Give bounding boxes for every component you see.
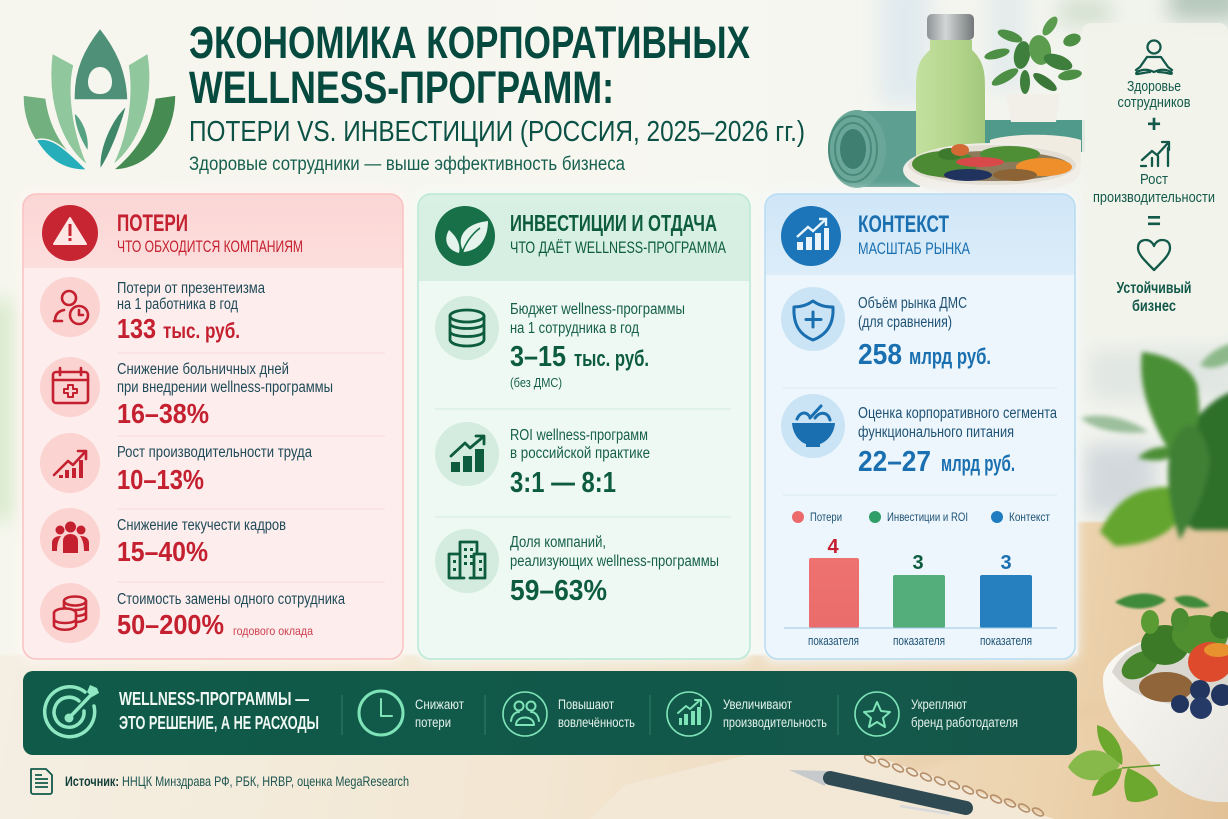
heading: investments: ИНВЕСТИЦИИ И ОТДАЧА <box>510 210 717 236</box>
panel: investments <box>414 190 754 663</box>
source: Источник: <box>65 773 119 789</box>
chart legend: Инвестиции и ROI <box>887 510 968 524</box>
item: share of companies <box>435 529 719 607</box>
item: presenteeism: на 1 работника в год <box>117 296 238 313</box>
panel: formula: бизнес <box>1132 298 1176 315</box>
item: presenteeism: Потери от презентеизма <box>117 280 265 297</box>
illustration: notebook and pen <box>590 752 1054 819</box>
benefit: reduce losses: потери <box>415 715 451 730</box>
title: WELLNESS-ПРОГРАММ: <box>189 62 614 113</box>
benefit: employer brand: Укрепляют <box>911 697 967 712</box>
item: replacement cost <box>40 583 345 643</box>
logo: lotus <box>23 28 176 170</box>
title: ЭКОНОМИКА КОРПОРАТИВНЫХ <box>189 17 750 68</box>
icon: document <box>31 769 52 794</box>
item: ROI: в российской практике <box>510 445 650 462</box>
panel: losses <box>19 190 407 663</box>
item: budget: Бюджет wellness-программы <box>510 301 685 318</box>
item: functional food <box>781 394 1057 478</box>
illustration: rolled yoga mat <box>828 110 1085 188</box>
bar chart: 4 <box>827 536 839 558</box>
item: DMS market: млрд руб. <box>909 344 991 369</box>
chart legend: Контекст <box>1009 510 1050 524</box>
bar chart <box>784 536 1057 648</box>
banner headline: ЭТО РЕШЕНИЕ, А НЕ РАСХОДЫ <box>119 712 319 733</box>
benefit: employer brand <box>855 692 1018 736</box>
illustration: potted plant <box>983 14 1083 122</box>
chart legend <box>792 510 1050 524</box>
panel: formula: + <box>1147 111 1161 138</box>
item: share of companies: реализующих wellness-программы <box>510 553 719 570</box>
benefit: employer brand: бренд работодателя <box>911 715 1018 730</box>
item: replacement cost: годового оклада <box>233 624 313 638</box>
panel: formula: Устойчивый <box>1116 280 1192 297</box>
item: budget: на 1 сотрудника в год <box>510 320 639 337</box>
item: ROI <box>435 422 650 499</box>
source: ННЦК Минздрава РФ, РБК, HRBP, оценка MegaResearch <box>122 773 409 789</box>
item: DMS market: (для сравнения) <box>858 314 952 331</box>
item: staff turnover: 15–40% <box>117 536 208 567</box>
illustration: blurred basil plant <box>1080 342 1228 609</box>
item: budget <box>435 296 685 390</box>
banner headline <box>119 688 319 733</box>
bar chart: 3 <box>1000 552 1012 574</box>
heading: investments <box>510 210 726 257</box>
item: DMS market: 258 <box>858 339 902 371</box>
icon: warning <box>42 205 98 261</box>
item: budget: тыс. руб. <box>574 346 649 371</box>
illustration: water bottle <box>916 14 985 165</box>
benefit: engagement <box>503 692 635 736</box>
icon: target <box>45 685 99 737</box>
benefit: productivity: Увеличивают <box>723 697 792 712</box>
heading: context <box>858 211 970 258</box>
panel: context <box>761 190 1079 663</box>
heading: losses: ЧТО ОБХОДИТСЯ КОМПАНИЯМ <box>117 238 303 256</box>
heading: losses <box>117 210 303 256</box>
item: presenteeism: тыс. руб. <box>163 320 240 343</box>
item: presenteeism: 133 <box>117 313 156 344</box>
heading: losses: ПОТЕРИ <box>117 210 188 237</box>
benefit: productivity: производительность <box>723 715 827 730</box>
item: ROI: ROI wellness-программ <box>510 427 648 444</box>
heading: investments: ЧТО ДАЁТ WELLNESS-ПРОГРАММА <box>510 239 726 257</box>
item: functional food: функционального питания <box>858 424 1014 441</box>
bar chart: показателя <box>808 634 859 648</box>
icon: meditation <box>1136 40 1172 74</box>
item: productivity: Рост производительности труда <box>117 444 312 461</box>
item: staff turnover: Снижение текучести кадров <box>117 517 286 534</box>
panel: formula: сотрудников <box>1118 94 1191 111</box>
benefit: engagement: вовлечённость <box>558 715 635 730</box>
banner headline: WELLNESS-ПРОГРАММЫ — <box>119 688 309 709</box>
item: ROI: 3:1 — 8:1 <box>510 467 616 499</box>
title: ПОТЕРИ VS. ИНВЕСТИЦИИ (РОССИЯ, 2025–2026 гг.) <box>189 116 805 148</box>
icon: leaf <box>435 206 495 266</box>
benefit: reduce losses: Снижают <box>415 697 464 712</box>
item: productivity: 10–13% <box>117 464 204 495</box>
subtitle: Здоровые сотрудники — выше эффективность бизнеса <box>189 154 625 175</box>
benefit: reduce losses <box>359 691 464 735</box>
item: budget: (без ДМС) <box>510 376 562 390</box>
item: sick days: 16–38% <box>117 398 209 429</box>
benefit: productivity <box>667 692 827 736</box>
item: share of companies: Доля компаний, <box>510 534 606 551</box>
chart legend: Потери <box>810 510 842 524</box>
item: functional food: 22–27 <box>858 446 931 478</box>
heading: context: МАСШТАБ РЫНКА <box>858 240 970 258</box>
illustration: food bowl <box>903 143 1081 197</box>
item: replacement cost: Стоимость замены одного сотрудника <box>117 591 345 608</box>
benefit: engagement: Повышают <box>558 697 614 712</box>
panel: formula <box>1082 23 1228 336</box>
bar chart: показателя <box>893 634 945 648</box>
icon: growth chart <box>1141 142 1169 166</box>
source <box>31 769 409 794</box>
title <box>189 17 805 148</box>
item: share of companies: 59–63% <box>510 575 607 607</box>
item: DMS market <box>781 287 991 371</box>
icon: heart <box>1138 240 1170 270</box>
bar chart: показателя <box>980 634 1032 648</box>
heading: context: КОНТЕКСТ <box>858 211 949 238</box>
panel: formula: Рост <box>1140 171 1168 188</box>
item: sick days: при внедрении wellness-программы <box>117 379 333 396</box>
item: budget: 3–15 <box>510 341 566 373</box>
item: productivity <box>40 433 312 495</box>
panel: formula: Здоровье <box>1127 78 1181 95</box>
item: staff turnover <box>40 508 286 568</box>
item: DMS market: Объём рынка ДМС <box>858 295 967 312</box>
item: functional food: Оценка корпоративного сегмента <box>858 405 1057 422</box>
item: sick days: Снижение больничных дней <box>117 361 289 378</box>
banner <box>23 671 1077 755</box>
icon: context chart <box>781 206 841 266</box>
illustration: small green leaves <box>1068 725 1160 802</box>
bar chart: 3 <box>912 552 924 574</box>
illustration: salad bowl <box>1103 608 1228 802</box>
item: sick days <box>40 357 333 429</box>
item: presenteeism <box>40 277 265 344</box>
item: functional food: млрд руб. <box>941 451 1015 476</box>
item: replacement cost: 50–200% <box>117 609 224 640</box>
panel: formula: = <box>1147 208 1161 235</box>
